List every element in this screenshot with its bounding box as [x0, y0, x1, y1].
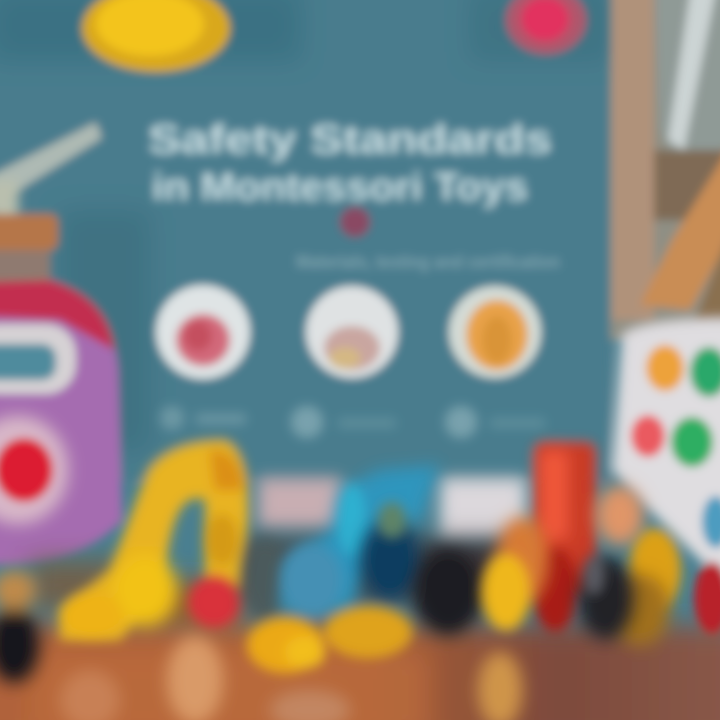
icon: yellow sun — [82, 0, 230, 72]
title — [148, 116, 552, 209]
card: color tiles — [612, 318, 720, 634]
icon: pink flower — [506, 0, 586, 54]
board: white toys shelf strips — [258, 478, 526, 540]
panel: teal board — [0, 0, 610, 480]
wooden sticks top right — [612, 0, 720, 320]
toy: dark wheel right — [578, 528, 681, 646]
icon circle: red — [156, 285, 250, 379]
caption 2 — [291, 406, 396, 438]
toy: yellow figure — [60, 440, 248, 640]
jar: purple bottle — [0, 214, 122, 565]
icon: small red mark — [340, 207, 370, 237]
icon circle: mixed — [306, 286, 398, 378]
caption 3 — [445, 406, 545, 438]
background: right wall — [600, 0, 720, 340]
toy: black wheel centre — [414, 548, 482, 636]
title: in Montessori Toys — [152, 166, 528, 209]
icon: white stick top left — [0, 122, 102, 220]
toy: dark wheel left — [0, 570, 40, 683]
toy: blue figure — [243, 465, 440, 624]
toy: yellow base — [247, 606, 412, 673]
table: wooden surface — [0, 625, 720, 720]
title: Safety Standards — [148, 116, 552, 162]
shadow behind toys — [30, 540, 530, 630]
toy: red and orange figure — [482, 442, 644, 632]
caption 1 — [160, 406, 246, 430]
icon circle: orange — [449, 286, 541, 378]
subtitle text: Materials, testing and certification — [296, 252, 560, 272]
